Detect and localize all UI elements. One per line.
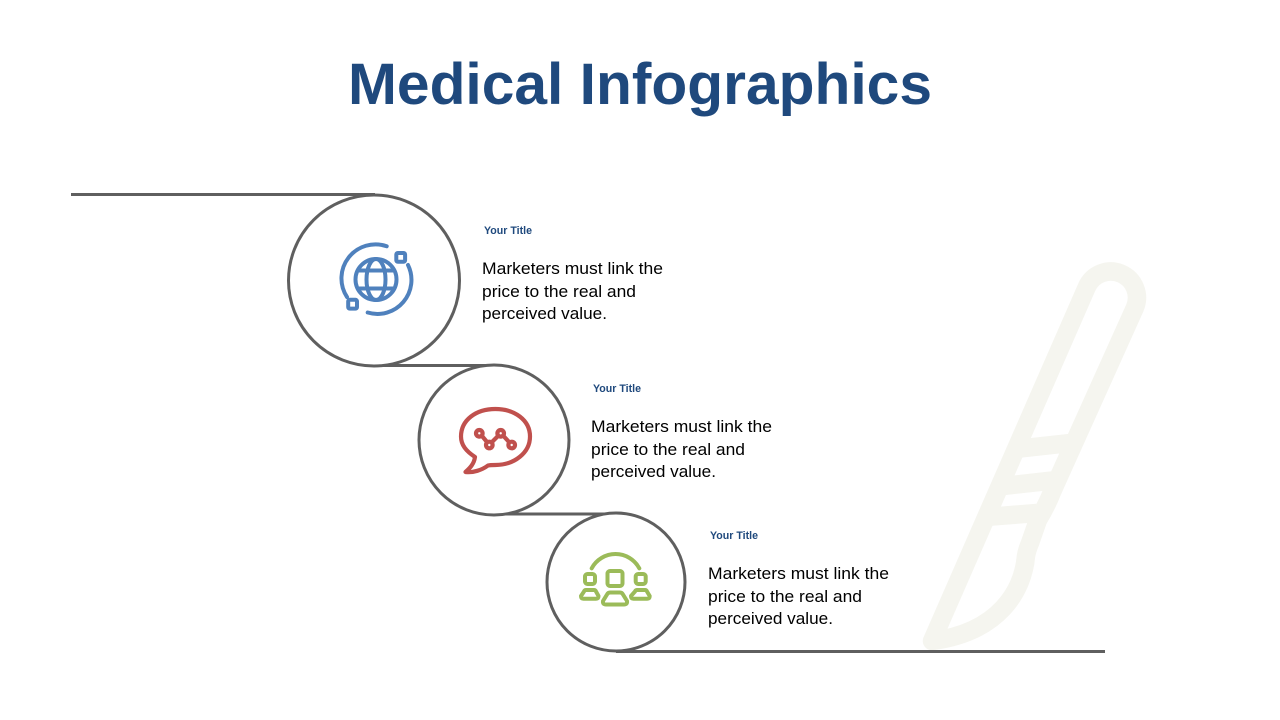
connector line: first to second circle xyxy=(374,364,494,367)
text block 1: Your Title xyxy=(484,225,532,237)
text block 2: Your Title xyxy=(593,383,641,395)
circle 1 xyxy=(288,195,460,366)
text block 1: Marketers must link the xyxy=(482,260,663,278)
text block 3: Your Title xyxy=(710,530,758,542)
icon: globe with orbit xyxy=(341,244,411,314)
text block 1: price to the real and xyxy=(482,283,636,301)
text block 2 xyxy=(591,383,772,481)
connector line: top xyxy=(71,193,375,196)
title: Medical Infographics xyxy=(348,52,932,117)
text block 3: price to the real and xyxy=(708,588,862,606)
text block 1 xyxy=(482,225,663,323)
text block 1: perceived value. xyxy=(482,305,607,323)
circle 3 xyxy=(547,513,685,651)
text block 3 xyxy=(708,530,889,628)
text block 3: perceived value. xyxy=(708,610,833,628)
circle 2 xyxy=(419,365,569,515)
icon: scalpel watermark xyxy=(932,272,1137,641)
connector line: bottom xyxy=(616,650,1105,653)
text block 3: Marketers must link the xyxy=(708,565,889,583)
text block 2: perceived value. xyxy=(591,463,716,481)
icon: speech bubble with line chart xyxy=(461,409,530,472)
text block 2: Marketers must link the xyxy=(591,418,772,436)
connector line: second to third circle xyxy=(494,512,616,516)
icon: group of people xyxy=(581,554,650,604)
text block 2: price to the real and xyxy=(591,441,745,459)
